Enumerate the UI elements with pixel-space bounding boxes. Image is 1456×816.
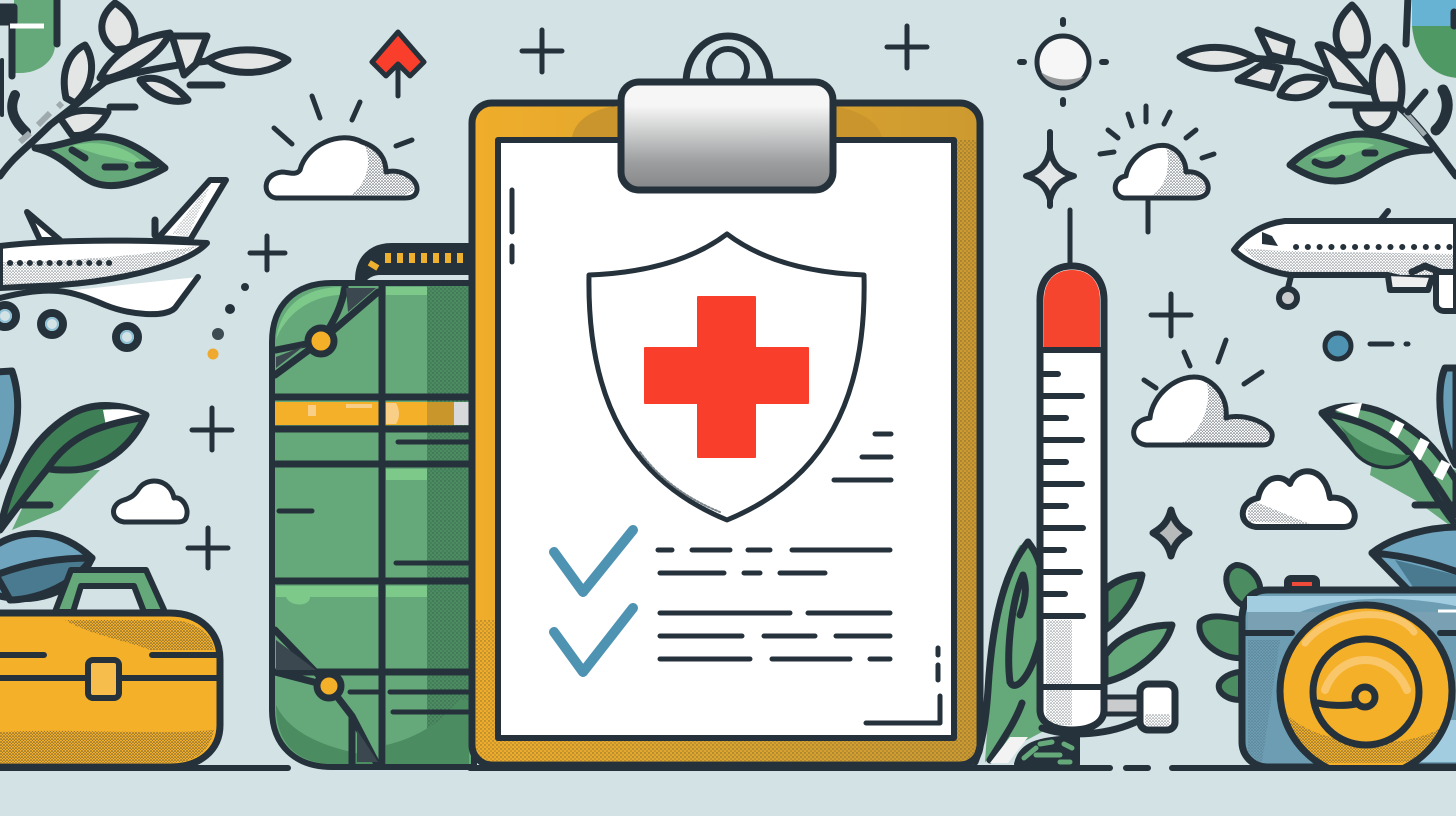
icon: small sparkle: [1153, 510, 1189, 556]
icon: suitcase green: [272, 246, 474, 767]
icon: cloud right small: [1243, 471, 1355, 527]
icon: cloud left small: [114, 481, 187, 522]
icon: cloud with rays right: [1134, 340, 1272, 445]
icon: dotted trail: [208, 283, 249, 360]
icon: airplane right: [1234, 211, 1456, 311]
icon: cloud with rays top right: [1100, 106, 1214, 232]
icon: corner bottle right: [1406, 0, 1456, 78]
icon: branch top right: [1180, 5, 1456, 181]
icons: plus signs: [188, 26, 1191, 568]
icon: clip: [621, 36, 833, 190]
icon: cloud with rays top left: [266, 96, 417, 198]
icon: yellow bag: [0, 570, 220, 767]
icon: leaves left: [0, 371, 146, 600]
icon: plant behind thermometer: [975, 542, 1172, 764]
icon: dot and dash: [1325, 333, 1408, 359]
icon: airplane left: [0, 180, 226, 348]
icon: leaves right: [1322, 368, 1456, 592]
icon: camera: [1199, 565, 1456, 777]
icon: up arrow diamond: [372, 32, 424, 96]
ground line: [0, 768, 1456, 816]
icon: sun: [1020, 20, 1106, 104]
text lines beside shield: [834, 434, 891, 480]
icon: corner bottle left: [0, 0, 57, 115]
text lines: checklist: [658, 550, 890, 659]
icon: thermometer: [1040, 210, 1175, 730]
icon: sparkle star: [1026, 132, 1074, 206]
icon: branch top left: [0, 3, 288, 186]
icon: check marks: [554, 530, 633, 672]
icon: shield with red cross: [589, 234, 864, 520]
panel: clipboard: [472, 103, 980, 765]
